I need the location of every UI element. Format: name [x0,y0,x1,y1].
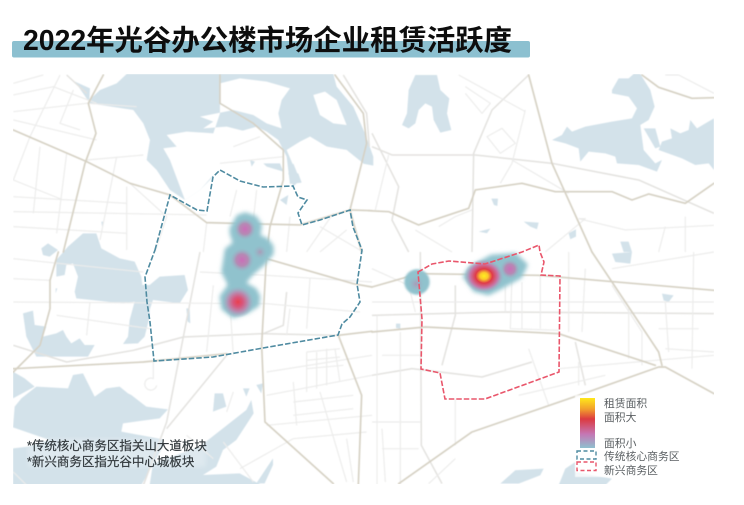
legend colour ramp [580,398,595,448]
water bodies [13,74,714,485]
hotspot: east [502,260,518,278]
heat zone: emerging business district [404,255,526,295]
footnotes: *新兴商务区指光谷中心城板块 [27,454,195,469]
footnote halo [28,439,206,467]
legend labels: 面积大 [604,410,637,424]
legend [575,395,695,477]
hotspot: south [224,288,252,317]
legend background [575,395,695,477]
hotspot: west [411,279,421,289]
road network [13,75,714,485]
legend labels: 租赁面积 [604,396,647,410]
legend labels: 新兴商务区 [604,463,658,477]
major roads [13,75,714,485]
hotspot: centre [232,250,252,270]
heat zone: traditional business district [222,214,272,318]
footnotes: *传统核心商务区指关山大道板块 [27,438,207,453]
map [13,74,714,485]
footnotes [27,438,207,469]
legend swatch: traditional [577,451,596,459]
hotspot: peak [465,260,502,292]
hotspot: north [236,220,254,238]
hotspot: centre east [256,248,264,256]
legend labels: 面积小 [604,437,637,450]
title bar [12,41,530,58]
boundary: traditional core business district [145,170,362,361]
title: 2022年光谷办公楼市场企业租赁活跃度 [23,25,512,57]
legend labels: 传统核心商务区 [604,449,680,463]
boundary: emerging business district [418,245,560,399]
legend labels [604,396,680,477]
legend swatch: emerging [577,462,596,470]
